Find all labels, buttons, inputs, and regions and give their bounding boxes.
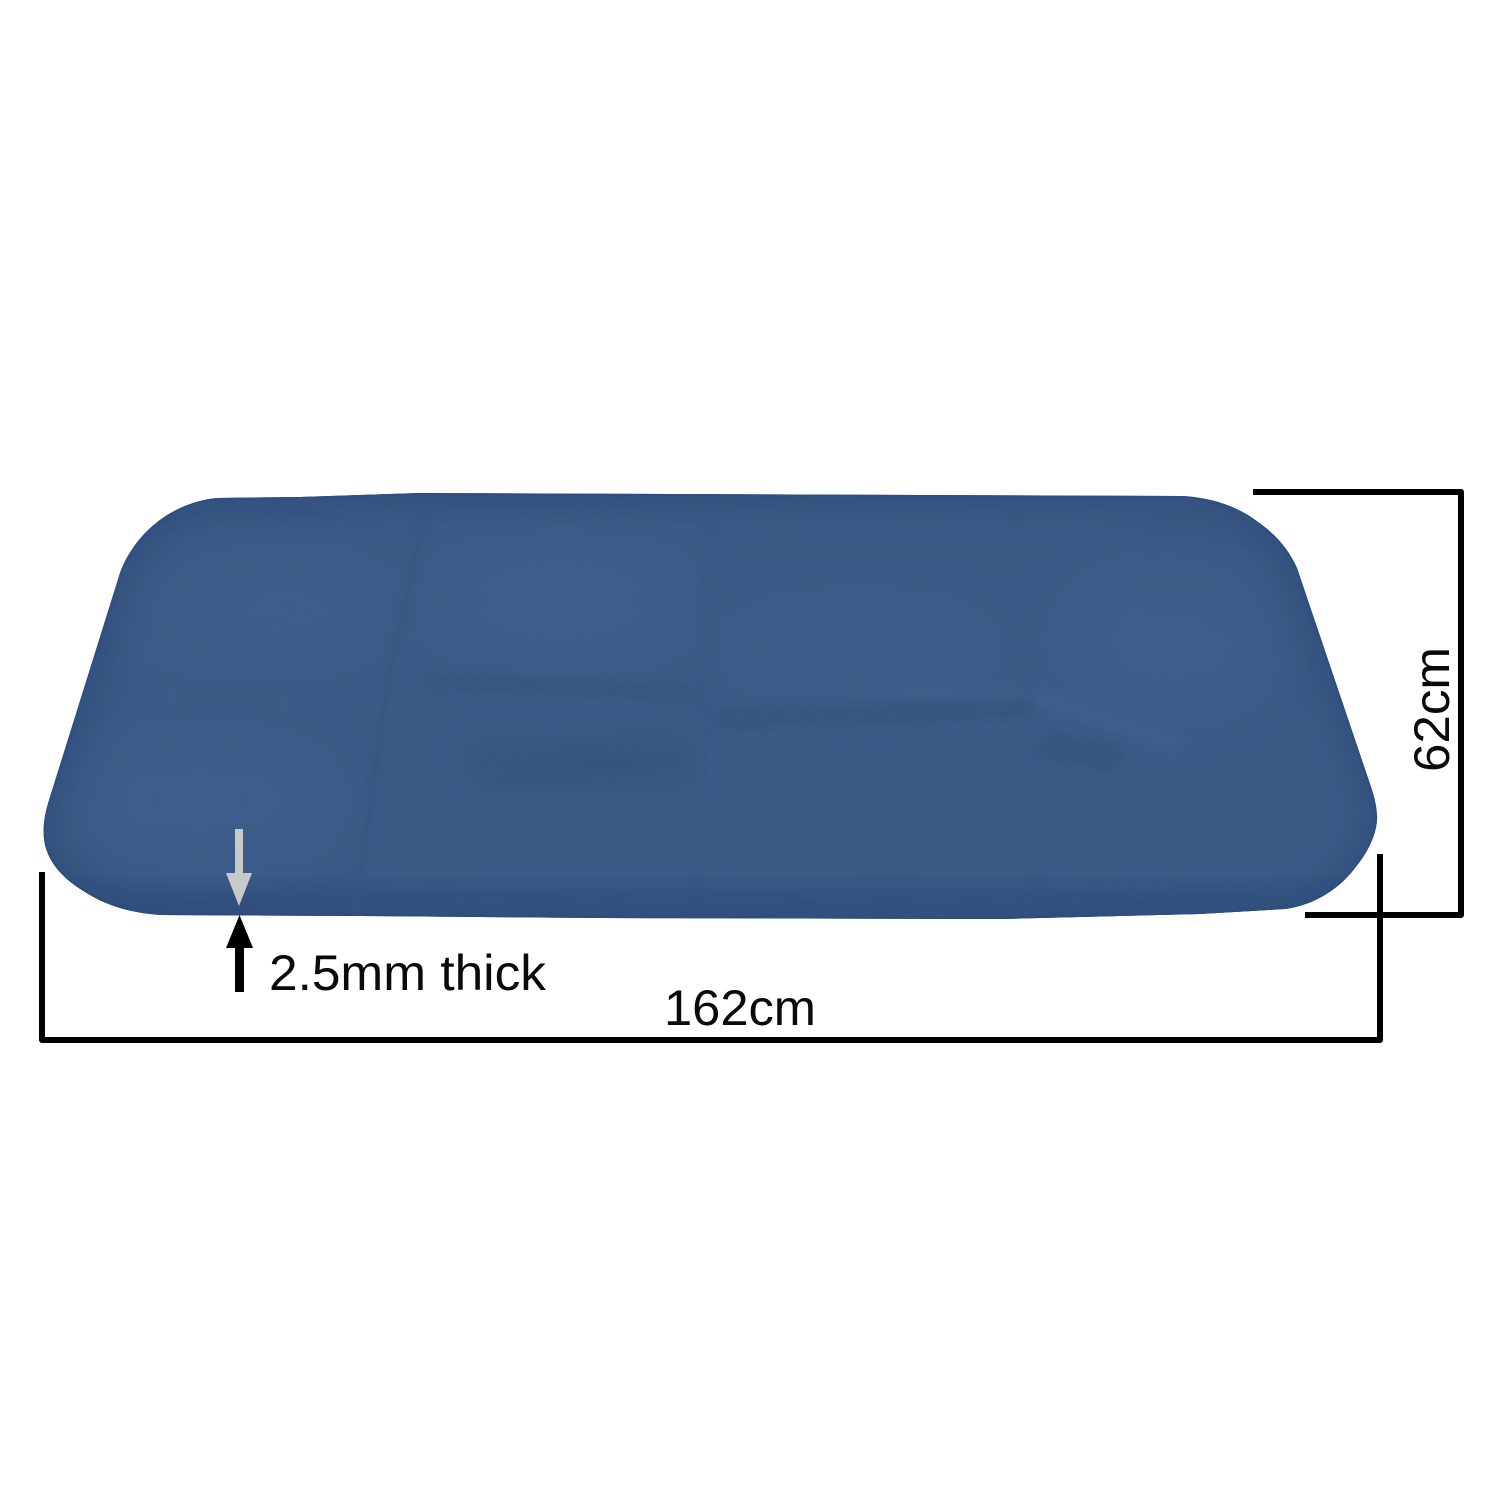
thickness arrows <box>226 829 253 992</box>
label: thickness: 2.5mm thick <box>269 945 547 1001</box>
label: width: 162cm <box>664 980 816 1036</box>
dark folds <box>779 704 1020 720</box>
height dimension bracket <box>1253 492 1461 915</box>
mat shading and folds <box>40 493 1380 925</box>
infographic: mat dimensions diagram <box>39 489 1464 1043</box>
icon: black arrow pointing up <box>226 915 253 992</box>
highlight ridge <box>900 692 1180 745</box>
blue mat <box>40 493 1380 925</box>
lighter patches <box>70 540 1270 850</box>
vertical creases <box>355 500 1040 915</box>
label: height: 62cm <box>1404 647 1460 772</box>
dark blotch <box>668 758 669 764</box>
icon: grey arrow pointing down <box>226 829 252 906</box>
width dimension bracket <box>42 854 1380 1040</box>
